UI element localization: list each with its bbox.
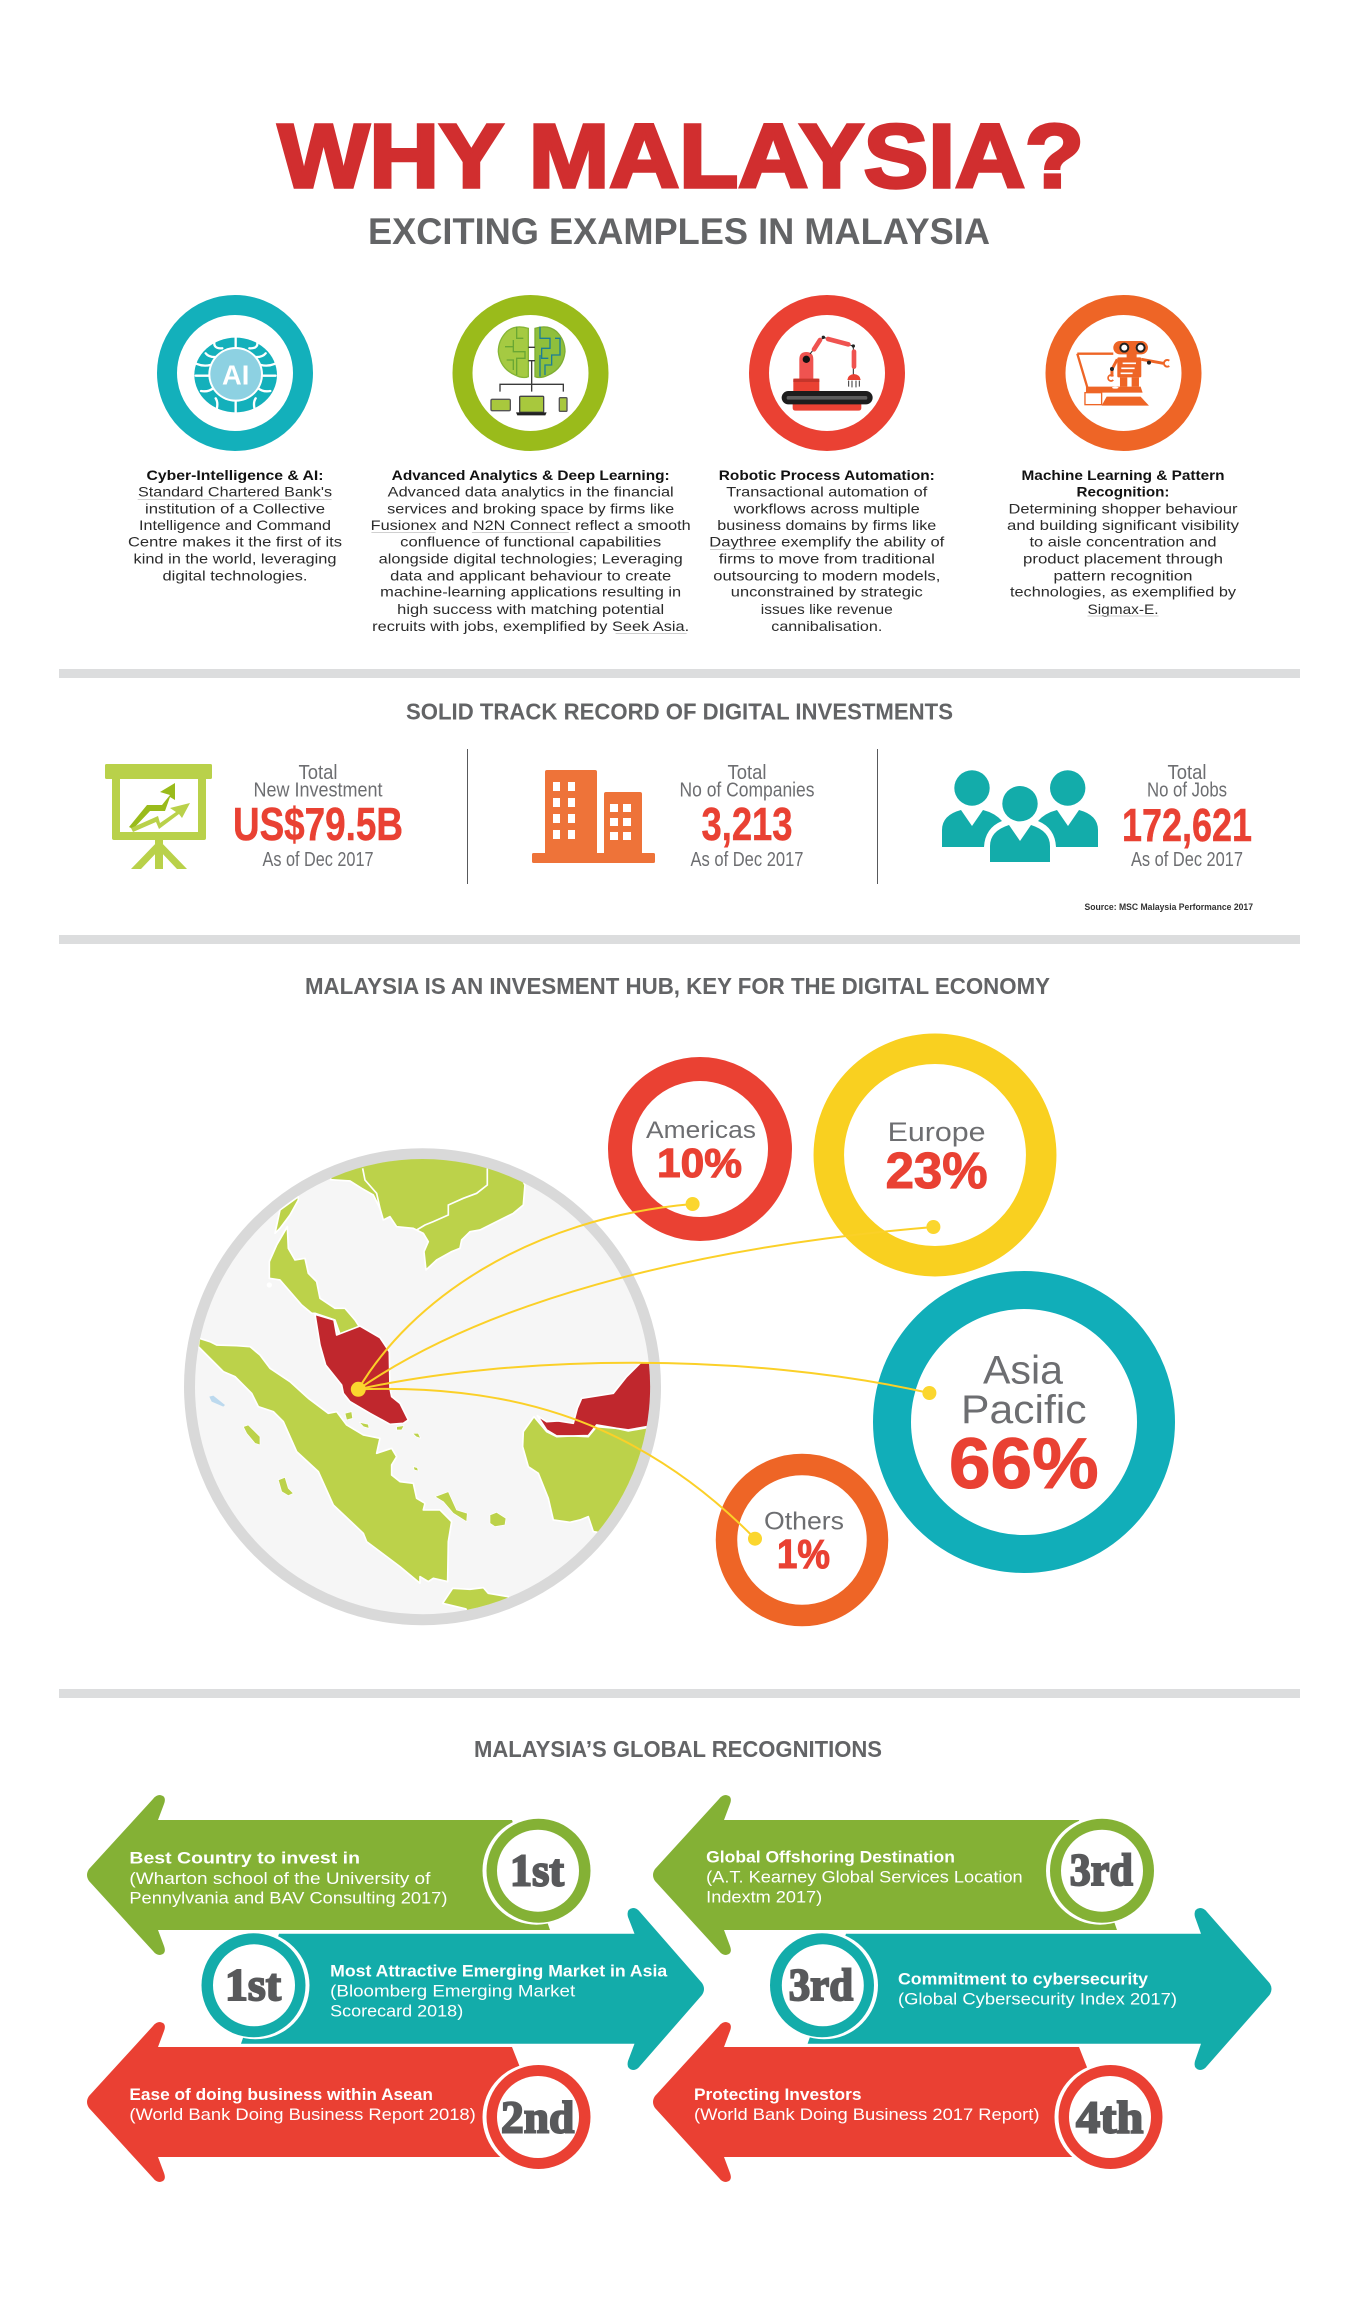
text: advanced analytics: machine-learning applications resulting in [380, 584, 681, 600]
arrow: best country to invest in: (Wharton school of the University of [129, 1869, 431, 1888]
globe map [190, 1145, 663, 1622]
text: cyber-intelligence: digital technologies. [162, 568, 308, 584]
text: robotic process automation: outsourcing to modern models, [713, 568, 940, 584]
text: advanced analytics: Advanced Analytics & Deep Learning: [392, 467, 670, 483]
arrow: most attractive emerging market: (Bloomberg Emerging Market [330, 1982, 576, 2001]
icon: people [942, 770, 1098, 862]
arrow: most attractive emerging market: 1st [225, 1959, 282, 2010]
text: advanced analytics: high success with matching potential [397, 601, 664, 617]
text: robotic process automation: business domains by firms like [717, 517, 937, 533]
text: robotic process automation: cannibalisation. [771, 618, 882, 634]
arrow: most attractive emerging market: Most Attractive Emerging Market in Asia [330, 1962, 668, 1981]
arrow: global offshoring destination: 3rd [1070, 1844, 1133, 1895]
arrow: global offshoring destination: Global Offshoring Destination [706, 1848, 955, 1867]
label: asia pacific [949, 1348, 1098, 1504]
stat: total companies: As of Dec 2017 [690, 849, 804, 871]
heading: global recognitions: MALAYSIA’S GLOBAL RECOGNITIONS [474, 1736, 882, 1762]
text: cyber-intelligence: institution of a Collective [145, 500, 325, 516]
text: robotic process automation: Robotic Process Automation: [719, 467, 935, 483]
ring: asia pacific [892, 1290, 1156, 1554]
subtitle: EXCITING EXAMPLES IN MALAYSIA [368, 211, 990, 252]
arrow: best country to invest in [87, 1795, 590, 1955]
text: robotic process automation: firms to move from traditional [719, 551, 935, 567]
source note: Source: MSC Malaysia Performance 2017 [1084, 902, 1253, 912]
text: advanced analytics [371, 467, 691, 634]
label: europe: 23% [886, 1142, 988, 1199]
text: robotic process automation: issues like revenue [761, 601, 893, 617]
panel: globe and shares [190, 1049, 1156, 1622]
stat: total companies [680, 762, 814, 871]
label: others: 1% [777, 1531, 830, 1577]
stat: total new investment: Total [298, 762, 338, 784]
label: americas: Americas [646, 1117, 756, 1144]
arrow: most attractive emerging market: Scorecard 2018) [330, 2002, 463, 2021]
label: asia pacific: Asia [983, 1348, 1064, 1392]
text: advanced analytics: data and applicant behaviour to create [390, 568, 671, 584]
stat: total companies: No of Companies [680, 780, 814, 802]
arrow: commitment to cybersecurity [770, 1908, 1272, 2070]
text: cyber-intelligence: Centre makes it the first of its [128, 534, 342, 550]
arrow: protecting investors: (World Bank Doing Business 2017 Report) [694, 2105, 1040, 2124]
label: europe: Europe [888, 1117, 986, 1147]
arrow: ease of doing business: (World Bank Doing Business Report 2018) [129, 2105, 476, 2124]
stat: total jobs [1122, 762, 1252, 871]
heading: investment hub: MALAYSIA IS AN INVESMENT HUB, KEY FOR THE DIGITAL ECONOMY [305, 973, 1050, 999]
arrow: protecting investors: Protecting Investors [694, 2085, 862, 2104]
arrow: ease of doing business: Ease of doing business within Asean [129, 2085, 433, 2104]
arrow: commitment to cybersecurity: 3rd [789, 1959, 853, 2010]
icon: brain network ring [462, 305, 598, 441]
text: advanced analytics: Fusionex and N2N Connect reflect a smooth [371, 517, 691, 533]
stat: total jobs: As of Dec 2017 [1131, 849, 1243, 871]
icon: buildings [532, 770, 655, 863]
label: americas: 10% [657, 1140, 742, 1186]
title: WHY MALAYSIA? [278, 107, 1084, 207]
text: advanced analytics: Advanced data analytics in the financial [388, 483, 674, 499]
text: advanced analytics: alongside digital technologies; Leveraging [379, 551, 683, 567]
stat: total new investment [233, 762, 403, 871]
text: robotic process automation: Daythree exemplify the ability of [709, 534, 944, 550]
text: robotic process automation: workflows across multiple [733, 500, 920, 516]
panel: examples [128, 305, 1239, 634]
panel: recognitions [87, 1795, 1272, 2182]
ring: others [726, 1464, 878, 1616]
arrow: most attractive emerging market [202, 1908, 704, 2070]
text: advanced analytics: confluence of functional capabilities [400, 534, 661, 550]
text: cyber-intelligence: Intelligence and Command [139, 517, 331, 533]
ring: europe [829, 1049, 1041, 1261]
arrow: global offshoring destination [653, 1795, 1154, 1955]
ring: americas [620, 1069, 780, 1229]
arrow: commitment to cybersecurity: (Global Cybersecurity Index 2017) [898, 1990, 1177, 2009]
icon: machine learning robot ring [1056, 305, 1192, 441]
label: asia pacific: 66% [949, 1425, 1098, 1504]
stat: total companies: Total [728, 762, 766, 784]
text: machine learning: Machine Learning & Pattern [1022, 467, 1224, 483]
text: machine learning: Sigmax-E. [1088, 601, 1158, 617]
text: machine learning: pattern recognition [1054, 568, 1192, 584]
arrow: best country to invest in: Best Country to invest in [129, 1848, 360, 1867]
stat: total jobs: No of Jobs [1147, 780, 1227, 802]
arrow: global offshoring destination: Indextm 2017) [706, 1888, 822, 1907]
text: cyber-intelligence: Cyber-Intelligence & AI: [146, 467, 324, 483]
icon: AI brain ring: AI [222, 359, 249, 390]
icon: AI brain ring [167, 305, 303, 441]
stat: total new investment: New Investment [254, 780, 383, 802]
label: europe [886, 1117, 988, 1199]
arrow: best country to invest in: 1st [510, 1845, 565, 1896]
text: cyber-intelligence: kind in the world, leveraging [134, 551, 336, 567]
connector lines [358, 1204, 933, 1539]
arrow: global offshoring destination: (A.T. Kearney Global Services Location [706, 1868, 1023, 1887]
arrow: commitment to cybersecurity: Commitment to cybersecurity [898, 1970, 1149, 1989]
arrow: best country to invest in: Pennylvania and BAV Consulting 2017) [129, 1888, 447, 1907]
icon: robot arm ring [759, 305, 895, 441]
arrow: ease of doing business: 2nd [501, 2092, 575, 2143]
connector dots [351, 1197, 940, 1546]
text: cyber-intelligence: Standard Chartered Bank's [138, 483, 332, 499]
heading: track record: SOLID TRACK RECORD OF DIGITAL INVESTMENTS [406, 698, 953, 724]
text: advanced analytics: services and broking space by firms like [387, 500, 674, 516]
text: cyber-intelligence [128, 467, 342, 584]
text: robotic process automation [709, 467, 944, 634]
stat: total jobs: 172,621 [1122, 799, 1252, 851]
stat: total companies: 3,213 [702, 798, 792, 850]
label: americas [646, 1117, 756, 1186]
stat: total jobs: Total [1168, 762, 1206, 784]
panel: investment stats [105, 749, 1253, 912]
text: machine learning: Recognition: [1076, 483, 1170, 499]
stat: total new investment: As of Dec 2017 [262, 849, 374, 871]
text: robotic process automation: Transactional automation of [726, 483, 927, 499]
icon: presentation board [105, 764, 212, 869]
label: others [764, 1508, 844, 1577]
label: others: Others [764, 1508, 844, 1536]
text: machine learning: Determining shopper behaviour [1008, 500, 1238, 516]
label: asia pacific: Pacific [961, 1388, 1087, 1432]
text: machine learning [1007, 467, 1239, 617]
text: machine learning: to aisle concentration and [1030, 534, 1216, 550]
text: machine learning: technologies, as exemplified by [1010, 584, 1236, 600]
stat: total new investment: US$79.5B [233, 798, 403, 850]
arrow: ease of doing business [87, 2022, 590, 2182]
text: robotic process automation: unconstrained by strategic [731, 584, 923, 600]
arrow: protecting investors: 4th [1076, 2092, 1143, 2143]
arrow: protecting investors [653, 2022, 1162, 2182]
text: machine learning: and building significant visibility [1007, 517, 1239, 533]
text: advanced analytics: recruits with jobs, exemplified by Seek Asia. [372, 618, 689, 634]
text: machine learning: product placement through [1023, 551, 1223, 567]
